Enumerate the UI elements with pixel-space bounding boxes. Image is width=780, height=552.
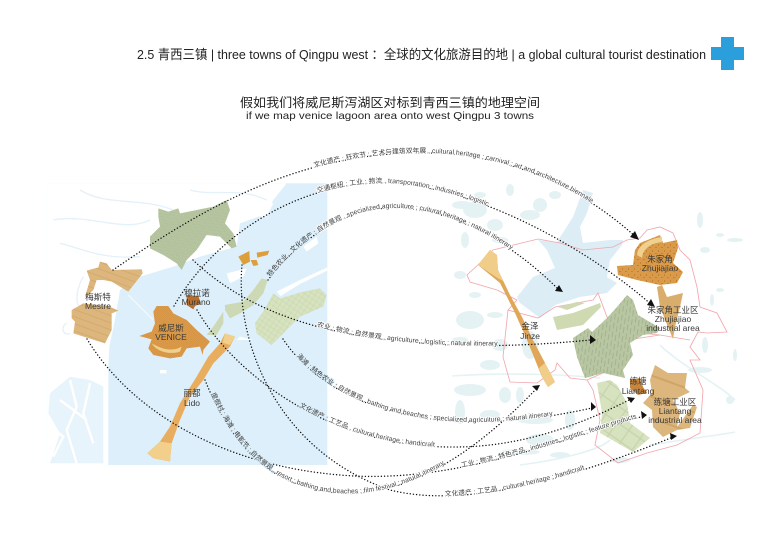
white causeway (128, 295, 153, 320)
label: venice: 威尼斯 (158, 323, 184, 333)
pink district boundary (467, 227, 727, 463)
mestre (72, 262, 143, 343)
map: west qingpu (452, 184, 743, 465)
lido (147, 333, 235, 462)
pond patches (452, 184, 743, 463)
liantang industrial (643, 365, 697, 437)
label: zhujiajiao industrial area: 朱家角工业区 (647, 305, 699, 315)
jinze (478, 250, 555, 387)
faint land lines (53, 190, 267, 334)
zhujiajiao industrial (657, 285, 683, 339)
label: zhujiajiao: 朱家角 (647, 254, 673, 264)
arrowheads (532, 231, 677, 440)
label: lido: Lido (184, 398, 200, 408)
liantang (630, 378, 647, 395)
lido sand ends (147, 333, 235, 462)
label: zhujiajiao industrial area: Zhujiajiao (655, 314, 691, 324)
caption route 7: 文化遗产 ; 工艺品 , cultural heritage ; handicraft (444, 465, 585, 496)
route 6 (197, 310, 631, 447)
place labels: venice (85, 288, 211, 408)
venice giudecca band (152, 343, 182, 353)
land water patches (48, 377, 103, 463)
mainland green zone (150, 200, 237, 270)
header line: 2.5 青西三镇 | three towns of Qingpu west ：全球的文化旅游目的地 | a global cultural tourist destination (137, 47, 706, 62)
arrow route 3 (555, 285, 563, 292)
label: lido: 丽都 (183, 388, 201, 398)
label: murano: Murano (182, 297, 211, 307)
label: jinze: Jinze (520, 331, 540, 341)
label: liantang industrial area: 练塘工业区 (654, 397, 697, 407)
outer islands (160, 200, 327, 373)
small green island (553, 302, 601, 330)
main title english: if we map venice lagoon area onto west Qingpu 3 towns (246, 110, 534, 122)
zhujiajiao (617, 235, 683, 285)
arrow route 9 (532, 385, 540, 391)
caption route 2: 交通枢纽 ; 工业 ; 物流 , transportation ; industries ; logistic (316, 177, 489, 206)
label: liantang: Liantang (622, 386, 655, 396)
main title chinese: 假如我们将威尼斯泻湖区对标到青西三镇的地理空间 (240, 95, 540, 110)
zhujiajiao green (573, 295, 660, 378)
route 5 (283, 339, 592, 422)
canal lines (452, 345, 735, 465)
label: mestre: Mestre (85, 301, 111, 311)
caption route 5: 海滩 ; 特色农业 ; 自然景观 , bathing and beaches ; specialized agriculture ; natural itinerary (296, 353, 552, 424)
label: zhujiajiao: Zhujiajiao (642, 263, 678, 273)
icon: blue plus (711, 37, 744, 70)
route 7 (241, 265, 673, 496)
label: venice: VENICE (155, 332, 187, 342)
arrow route 4 (590, 335, 596, 344)
label: zhujiajiao industrial area: industrial area (646, 323, 700, 333)
route 8 (87, 339, 644, 476)
label: liantang industrial area: Liantang (659, 406, 692, 416)
caption route 8: 工业 ; 物流 ; 特色产品 , industries ; logistic ; feature products (460, 415, 637, 468)
label: liantang: 练塘 (629, 376, 647, 386)
route 4 (193, 260, 590, 346)
route 9 (205, 380, 538, 493)
arrow route 5 (591, 402, 596, 411)
sant erasmo (255, 288, 327, 345)
small orange islands (238, 251, 269, 266)
label: murano: 穆拉诺 (184, 288, 210, 298)
arrow route 7 (670, 433, 677, 440)
caption route 9: 度假村 ; 海滩 ; 电影节 ; 自然景观 , resort ; bathing and beaches ; film festival ; natural itinerary (210, 392, 444, 494)
caption route 3: 特色农业 , 文化遗产 ; 自然景观 , specialized agriculture ; cultural heritage ; natural itinerary (266, 203, 514, 277)
caption route 1: 文化遗产 ; 狂欢节 ; 艺术与建筑双年展 , cultural heritage ; carnival ; art and architecture biennale (313, 147, 593, 204)
route 3 (268, 208, 561, 292)
label: mestre: 梅斯特 (85, 292, 111, 302)
arrow route 8 (641, 411, 647, 419)
caption route 6: 文化遗产 ; 工艺品 , cultural heritage ; handicraft (298, 402, 436, 448)
route 1 (113, 153, 637, 270)
route lines (87, 153, 673, 496)
arrow route 6 (627, 397, 635, 403)
caption route 4: 农业 ; 物流 ; 自然景观 , agriculture ; logistic ; natural itinerary (316, 320, 499, 348)
arrow route 2 (647, 299, 655, 307)
label: jinze: 金泽 (521, 321, 539, 331)
route captions (210, 147, 637, 496)
place labels: qingpu (520, 254, 702, 425)
liantang green (597, 380, 650, 452)
dianshan lake (517, 190, 623, 318)
jinze sand ends (478, 250, 555, 387)
route 2 (174, 183, 653, 306)
label: liantang industrial area: industrial area (648, 415, 702, 425)
venice (139, 306, 210, 358)
mainland land mass (47, 183, 287, 465)
land water lines (50, 380, 93, 463)
arrow route 1 (630, 231, 639, 240)
murano (187, 295, 201, 309)
green islands (207, 278, 268, 335)
map: venice lagoon (47, 183, 327, 465)
zhujiajiao band (637, 237, 662, 258)
lagoon water (47, 183, 327, 465)
